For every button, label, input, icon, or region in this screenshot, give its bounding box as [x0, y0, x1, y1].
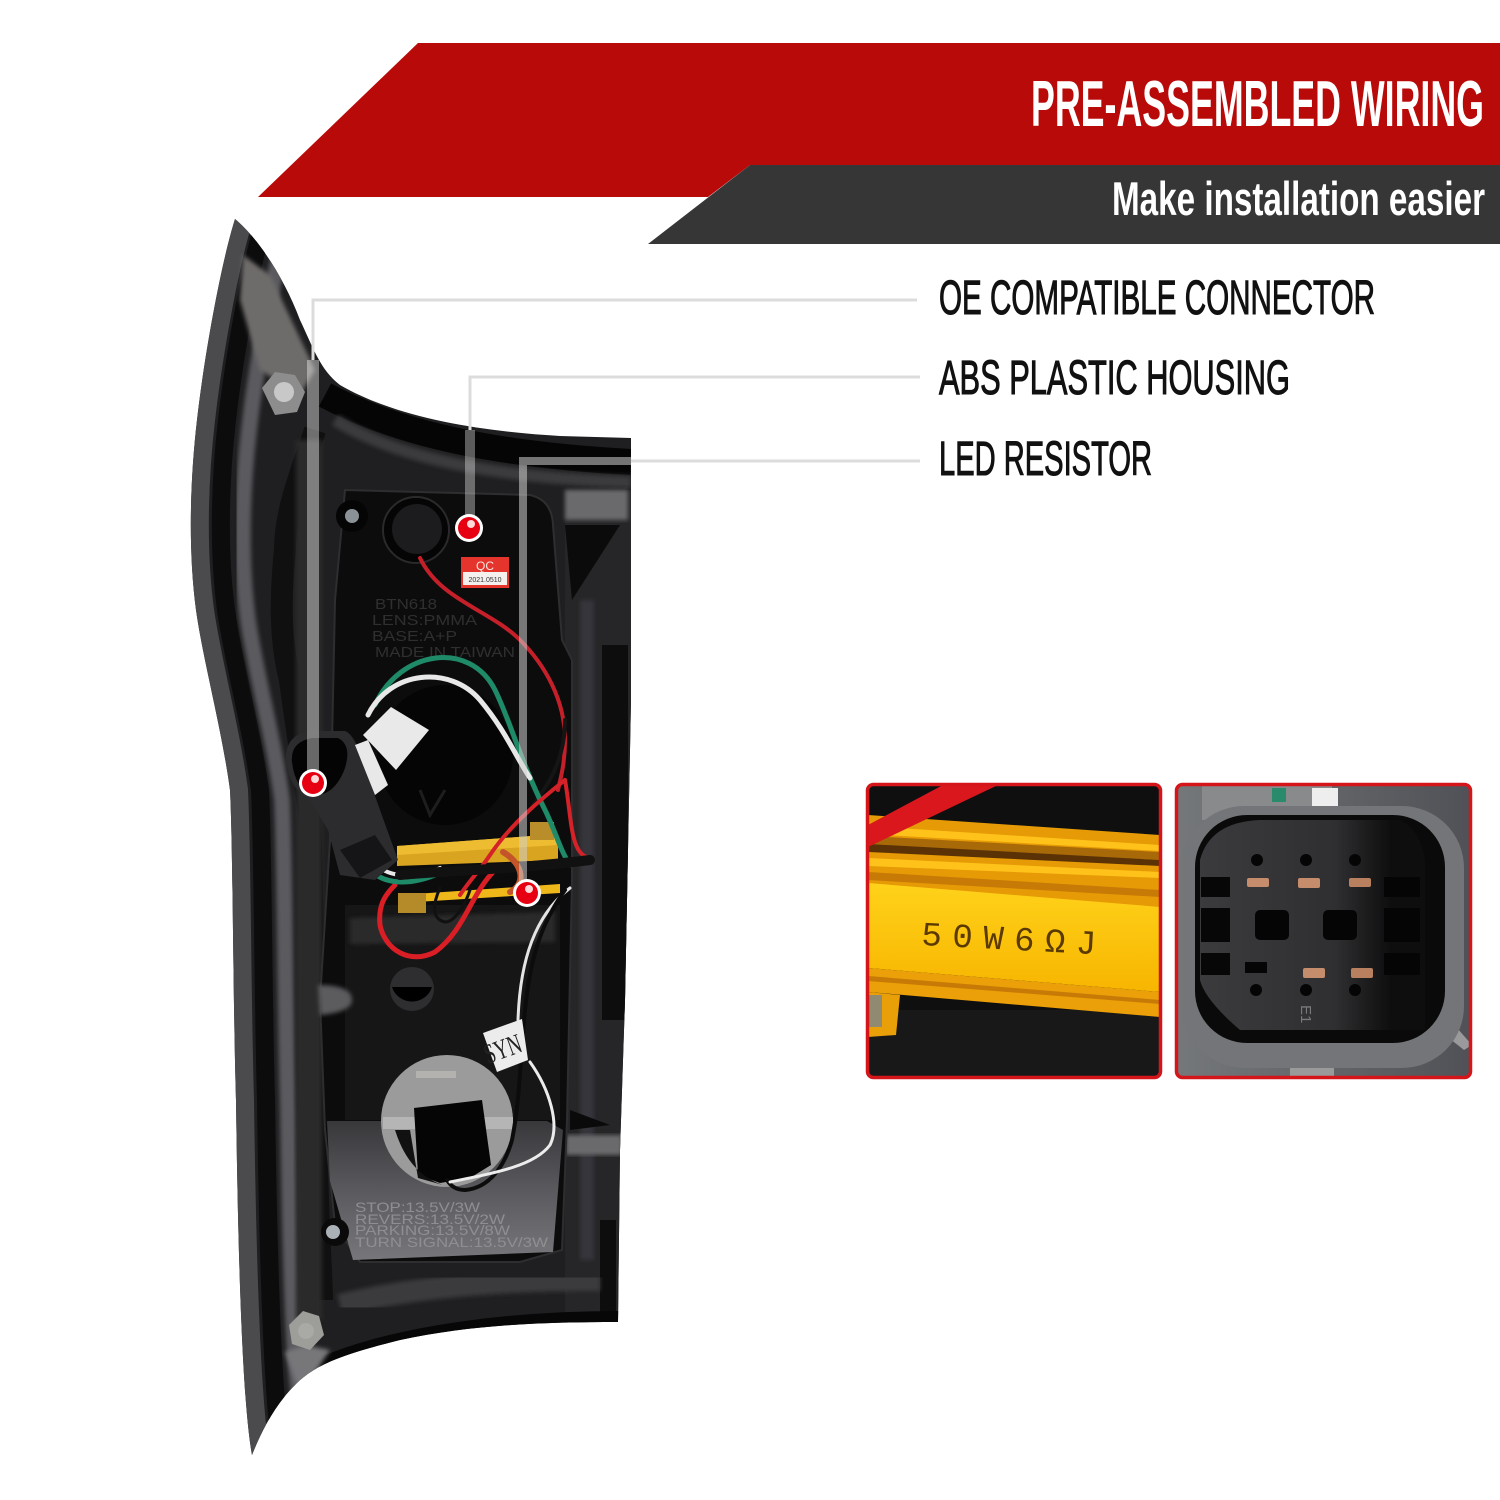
- leader: LED resistor: [523, 461, 920, 893]
- panel lower tone: [345, 905, 560, 1120]
- square sockets: [1255, 910, 1289, 940]
- resistor lower: [398, 884, 560, 913]
- left bevel highlight: [318, 985, 352, 1015]
- pin holes: [1251, 854, 1263, 866]
- bottom nut: [289, 1311, 324, 1350]
- half circle hole: [390, 967, 434, 1011]
- resistor ribs: [868, 815, 1160, 908]
- leader: OE compatible connector: [307, 300, 917, 784]
- connector face: [1200, 820, 1386, 1030]
- header banner: dark grey: [648, 165, 1500, 244]
- leader lines: [307, 300, 920, 893]
- ledge highlight: [350, 912, 555, 944]
- copper pins: [1247, 878, 1269, 887]
- QC label: QC: [476, 559, 494, 573]
- embossed lens text: MADE IN TAIWAN: [375, 644, 515, 661]
- resistor flat face: [868, 883, 1160, 992]
- inset: connector close-up: [1175, 783, 1473, 1081]
- rubber plug: [383, 497, 449, 563]
- bulb socket: [381, 1055, 513, 1187]
- housing silhouette: [191, 219, 631, 1455]
- screw bottom: [321, 1218, 349, 1246]
- side slots: [1201, 877, 1230, 897]
- embossed lens text: BASE:A+P: [372, 628, 457, 645]
- tail light housing photo: [191, 219, 631, 1455]
- connector body: [286, 731, 398, 880]
- embossed specification text: STOP:13.5V/3W: [355, 1199, 481, 1215]
- red wire: [868, 785, 998, 847]
- inset: resistor close-up: [866, 783, 1162, 1079]
- light wedge at top: [240, 255, 315, 395]
- embossed specification text: PARKING:13.5V/8W: [355, 1222, 511, 1238]
- round component behind wiring: [377, 685, 513, 825]
- housing shading: [199, 219, 631, 1455]
- white connector tab: [355, 740, 388, 795]
- marker dot: connector: [299, 769, 327, 797]
- embossed specification text: TURN SIGNAL:13.5V/3W: [355, 1234, 549, 1250]
- top edge band: [325, 395, 631, 462]
- grey lower panel: [327, 1121, 563, 1260]
- screw top: [336, 500, 368, 532]
- printed value: 50W6ΩJ: [920, 918, 1097, 965]
- SYN tag: SYN: [480, 1028, 526, 1071]
- embossed specification text: REVERS:13.5V/2W: [355, 1211, 506, 1227]
- embossed lens text: BTN618: [375, 596, 437, 613]
- QC label: 2021.0510: [468, 577, 502, 584]
- connector opening: [292, 738, 347, 795]
- connector tabs: [1202, 785, 1332, 820]
- embossed lens text: LENS:PMMA: [372, 612, 477, 629]
- embossed specification text: [355, 1199, 549, 1250]
- bolt tab: [868, 992, 900, 1037]
- wires: [368, 558, 590, 1190]
- resistor upper: [397, 822, 558, 866]
- lower ribs: [868, 968, 1160, 1017]
- embossed lens text: [372, 596, 515, 661]
- leader: ABS plastic housing: [465, 377, 920, 528]
- marker dot: housing: [455, 514, 483, 542]
- header banner: red: [258, 43, 1500, 197]
- moulded mark: E1: [1297, 1005, 1314, 1023]
- bottom frame: [320, 1318, 620, 1365]
- marker dot: resistor: [513, 879, 541, 907]
- connector shroud: [1182, 806, 1464, 1068]
- inner dark panel: [320, 490, 572, 1262]
- right frame: [565, 702, 631, 1323]
- top nut: [262, 372, 305, 415]
- white wiring tag: [363, 707, 429, 770]
- label: ABS plastic housing: ABS PLASTIC HOUSING: [939, 352, 1290, 405]
- label: LED resistor: LED RESISTOR: [939, 433, 1152, 486]
- QC label: [461, 557, 509, 588]
